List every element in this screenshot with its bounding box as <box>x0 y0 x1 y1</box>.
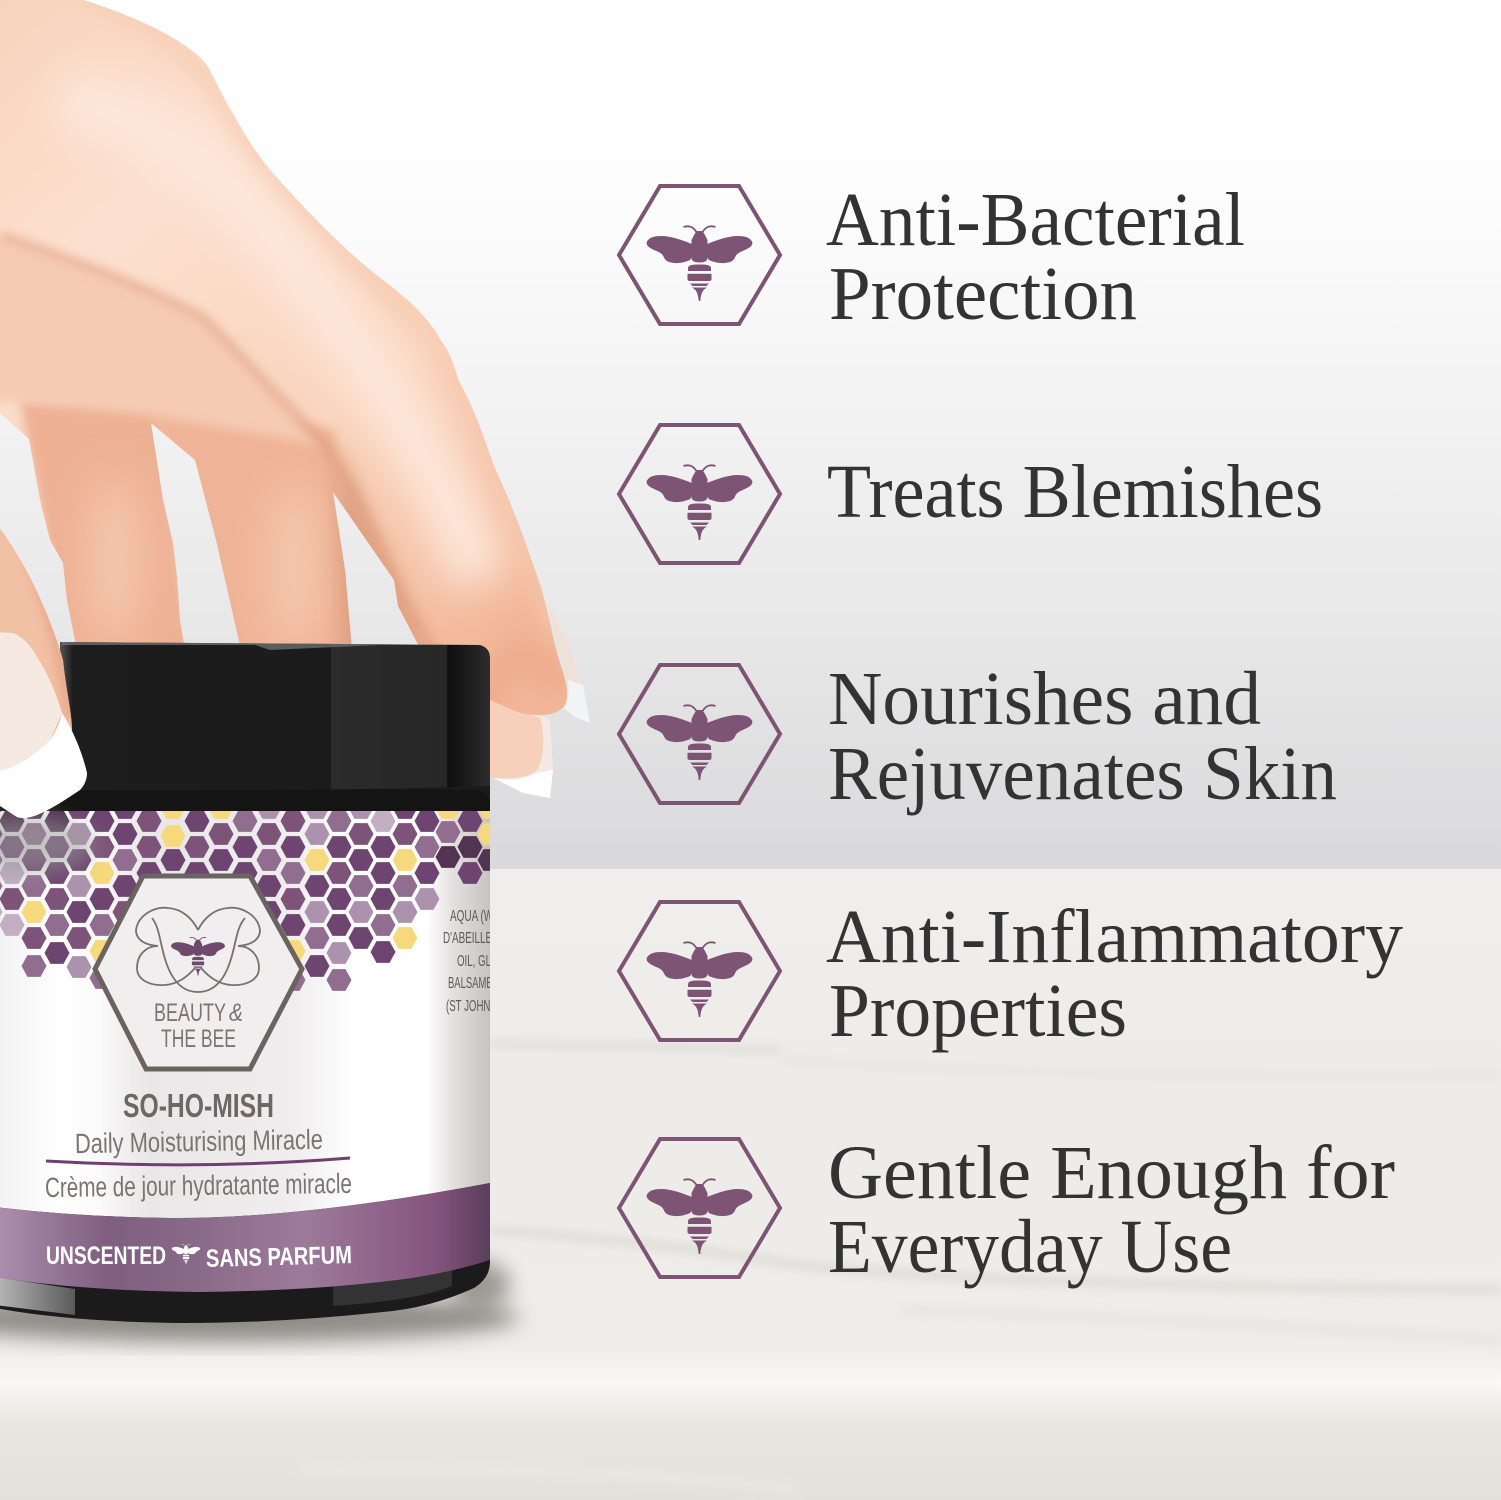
jar body <box>0 786 490 1323</box>
ingredient text: D'ABEILLE WAX <box>443 930 517 947</box>
lid top sheen <box>62 642 480 650</box>
nail tip <box>0 713 87 818</box>
nail body <box>0 632 62 772</box>
band text unscented: UNSCENTED <box>46 1242 166 1270</box>
logo wordmark <box>154 999 243 1053</box>
icon: hexagon bee <box>619 902 780 1040</box>
honeycomb pattern <box>0 797 502 991</box>
feature: Gentle Enough for Everyday Use <box>619 1131 1395 1289</box>
French descriptor: Crème de jour hydratante miracle <box>45 1168 352 1203</box>
marble counter <box>0 869 1501 1500</box>
text: Anti-Bacterial <box>826 178 1245 262</box>
icon: hexagon bee <box>619 425 780 563</box>
ingredient text: (ST JOHN'S WORT) <box>446 998 534 1015</box>
background wall gradient <box>0 0 1501 869</box>
text: Protection <box>829 252 1137 336</box>
text: Rejuvenates Skin <box>828 732 1337 816</box>
purple band <box>0 1183 490 1292</box>
neck <box>60 786 490 812</box>
left finger with nail over lid <box>0 522 87 818</box>
nail shadow on label <box>0 817 95 873</box>
ingredient text: AQUA (WATER) <box>450 908 522 925</box>
logo hexagon <box>95 876 302 1069</box>
base reflections <box>0 1270 452 1315</box>
logo bee <box>171 937 225 975</box>
lower fingertip with nail <box>480 695 553 798</box>
logo wordmark: & <box>229 999 243 1027</box>
back of hand and fingers <box>0 0 567 715</box>
text: Everyday Use <box>828 1205 1232 1289</box>
product name: SO-HO-MISH <box>123 1087 274 1124</box>
text: Treats Blemishes <box>827 450 1323 534</box>
logo wordmark: BEAUTY <box>154 999 226 1027</box>
purple divider <box>46 1158 350 1165</box>
icon: hexagon bee <box>619 186 780 324</box>
logo wordmark: THE BEE <box>161 1025 236 1053</box>
text: Nourishes and <box>828 657 1261 741</box>
label <box>0 808 490 1218</box>
text: Gentle Enough for <box>828 1131 1395 1215</box>
text: Anti-Inflammatory <box>826 895 1403 979</box>
feature: Nourishes and Rejuvenates Skin <box>619 657 1337 816</box>
ingredient text <box>444 910 490 1014</box>
top finger nail <box>547 603 590 723</box>
middle finger shading <box>160 414 352 644</box>
logo script monogram <box>136 908 260 992</box>
feature: Treats Blemishes <box>619 425 1323 563</box>
ingredient text: BALSAMEA RESIN <box>448 975 530 992</box>
lower index side <box>331 449 426 644</box>
text: Properties <box>829 969 1127 1053</box>
jar <box>0 642 534 1323</box>
ring finger shading <box>20 400 190 660</box>
feature: Anti-Bacterial Protection <box>619 178 1245 336</box>
ingredient text: OIL, GLYCERIN <box>457 953 527 970</box>
hand <box>0 0 590 798</box>
icon: hexagon bee <box>619 1139 780 1277</box>
feature: Anti-Inflammatory Properties <box>619 895 1403 1053</box>
band text sans parfum: SANS PARFUM <box>206 1241 352 1273</box>
band bee icon <box>172 1244 200 1264</box>
jar shadow on counter <box>0 1261 520 1342</box>
English descriptor: Daily Moisturising Miracle <box>75 1124 323 1159</box>
lid <box>60 642 490 790</box>
icon: hexagon bee <box>619 665 780 803</box>
